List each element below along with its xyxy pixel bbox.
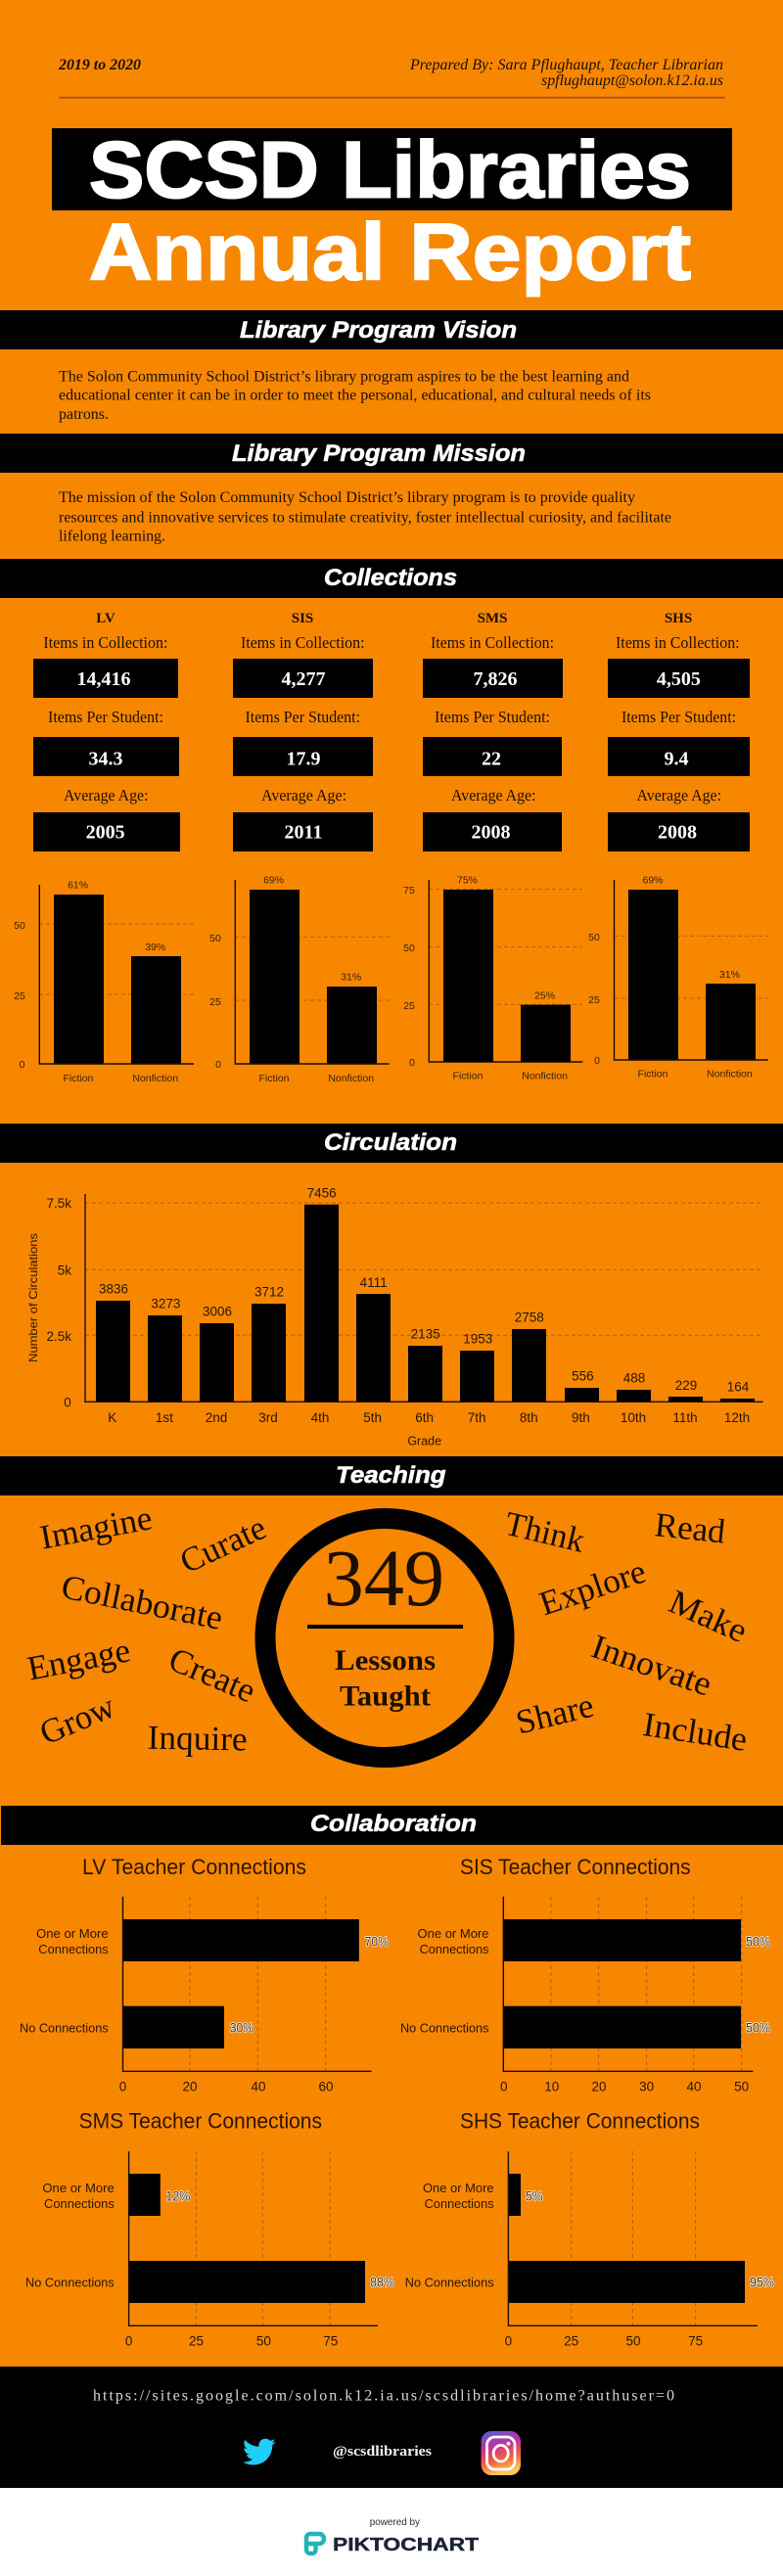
bar chart: SMS teacher connections: 0 [125, 2334, 132, 2349]
word cloud left: Imagine [37, 1498, 155, 1557]
word cloud right: Share [512, 1686, 597, 1741]
panel: SHS stats: 4,505 [657, 668, 701, 690]
bar chart: circulation by grade: 488 [623, 1371, 645, 1386]
bar chart: SIS teacher connections: 50% [746, 1933, 770, 1949]
wordmark: PIKTOCHART [333, 2534, 480, 2554]
lessons taught ring: Taught [340, 1680, 431, 1713]
mission text: lifelong learning. [59, 528, 165, 544]
bar chart: SMS fiction vs nonfiction: 50 [403, 943, 415, 954]
panel: SMS stats: 7,826 [474, 668, 517, 690]
bar chart: SIS teacher connections: 0 [500, 2080, 508, 2094]
word cloud right: Think [501, 1504, 588, 1560]
bar chart: LV fiction vs nonfiction: 39% [145, 942, 165, 953]
bar chart: SMS teacher connections: SMS Teacher Connections [79, 2108, 322, 2133]
panel: LV stats: LV [96, 611, 115, 626]
panel: SHS stats: Average Age: [636, 786, 721, 805]
bar chart: SIS teacher connections: Connections [420, 1943, 489, 1956]
word cloud left: Grow [34, 1686, 120, 1752]
bar chart: LV teacher connections: No Connections [20, 2022, 109, 2036]
word cloud left: Engage [24, 1631, 133, 1688]
bar chart: SMS teacher connections: 12% [165, 2187, 190, 2203]
powered by: powered by [370, 2516, 421, 2528]
bar chart: SMS fiction vs nonfiction: 0 [409, 1057, 415, 1069]
bar chart: SIS teacher connections: No Connections [400, 2022, 489, 2036]
bar chart: SIS fiction vs nonfiction: 69% [263, 875, 284, 887]
bar chart: SMS fiction vs nonfiction [403, 875, 582, 1082]
panel: SMS stats: 2008 [472, 822, 511, 844]
bar chart: SIS fiction vs nonfiction: Nonfiction [328, 1073, 374, 1084]
bar chart: circulation by grade: 3712 [254, 1285, 284, 1300]
lessons taught ring: 349 [324, 1533, 444, 1623]
panel: SIS stats: 4,277 [282, 668, 325, 690]
word cloud right: Explore [534, 1552, 651, 1623]
heading: teaching: Teaching [336, 1462, 446, 1489]
panel: SHS stats: SHS [665, 611, 692, 626]
bar chart: LV fiction vs nonfiction: Nonfiction [132, 1073, 178, 1084]
bar chart: LV teacher connections: LV Teacher Connections [82, 1855, 306, 1879]
word cloud right [501, 1504, 753, 1759]
bar chart: SMS teacher connections: 25 [189, 2334, 204, 2349]
panel: SHS stats: 2008 [658, 822, 697, 844]
bar chart: circulation by grade: Grade [407, 1435, 441, 1449]
social handle: @scsdlibraries [333, 2444, 432, 2460]
heading: vision: Library Program Vision [240, 317, 517, 344]
bar chart: LV teacher connections: 60 [318, 2080, 334, 2094]
preparer: Prepared By: Sara Pflughaupt, Teacher Librarian [409, 57, 723, 73]
bar chart: LV teacher connections: 0 [119, 2080, 126, 2094]
footer: white band [0, 2488, 783, 2576]
word cloud left [24, 1498, 272, 1758]
heading: collections [0, 559, 783, 598]
bar chart: SMS fiction vs nonfiction: 25 [403, 1000, 415, 1012]
bar chart: LV teacher connections [20, 1855, 389, 2094]
bar chart: SIS fiction vs nonfiction [209, 875, 390, 1084]
lessons taught ring [265, 1519, 504, 1758]
bar chart: circulation by grade: 7th [468, 1410, 486, 1425]
panel: SMS stats: SMS [478, 611, 507, 626]
vision text: The Solon Community School District’s library program aspires to be the best learning and [59, 368, 629, 386]
bar chart: SIS teacher connections: 10 [544, 2080, 559, 2094]
bar chart: circulation by grade: 8th [520, 1410, 538, 1425]
word cloud right: Include [640, 1705, 750, 1759]
bar chart: SHS teacher connections: 25 [564, 2334, 578, 2349]
vision text [59, 368, 651, 423]
panel: LV stats: Items in Collection: [43, 633, 167, 652]
bar chart: SMS teacher connections: 75 [323, 2334, 338, 2349]
bar chart: SHS fiction vs nonfiction: 69% [642, 875, 664, 887]
panel: SHS stats: 9.4 [664, 748, 689, 769]
bar chart: SIS fiction vs nonfiction: 31% [341, 971, 361, 983]
panel: LV stats: 14,416 [76, 668, 131, 690]
bar chart: LV teacher connections: 70% [364, 1933, 389, 1949]
mission text: resources and innovative services to stimulate creativity, foster intellectual curiosity, and facilitate [59, 509, 671, 526]
bar chart: LV fiction vs nonfiction: Fiction [64, 1073, 94, 1084]
bar chart: SIS teacher connections: 50% [746, 2020, 770, 2036]
bar chart: circulation by grade: 7.5k [46, 1196, 71, 1211]
panel: SMS stats: Items in Collection: [431, 633, 554, 652]
bar chart: circulation by grade: 4111 [360, 1275, 388, 1290]
bar chart: circulation by grade: 10th [621, 1410, 646, 1425]
bar chart: SIS teacher connections [400, 1855, 770, 2094]
bar chart: LV fiction vs nonfiction [14, 879, 194, 1084]
panel: SIS stats: Items Per Student: [245, 708, 360, 726]
bar chart: circulation by grade: 2135 [411, 1327, 440, 1342]
panel: LV stats: Average Age: [64, 786, 149, 805]
bar chart: SIS fiction vs nonfiction: Fiction [259, 1073, 290, 1084]
word cloud left: Inquire [147, 1719, 248, 1758]
heading: circulation: Circulation [324, 1129, 457, 1156]
bar chart: circulation by grade: 229 [675, 1378, 697, 1393]
bar chart: SMS fiction vs nonfiction: 75% [457, 875, 478, 887]
panel: SIS stats: 2011 [285, 822, 322, 844]
icon: twitter bird [243, 2439, 276, 2465]
word cloud right: Innovate [586, 1627, 716, 1704]
bar chart: circulation by grade: 556 [572, 1369, 594, 1384]
bar chart: SMS fiction vs nonfiction: 25% [534, 990, 555, 1002]
panel: LV stats: 34.3 [88, 748, 123, 769]
bar chart: SHS fiction vs nonfiction: 31% [719, 969, 740, 981]
bar chart: SHS fiction vs nonfiction [588, 875, 768, 1081]
word cloud left: Curate [174, 1508, 272, 1581]
bar chart: LV fiction vs nonfiction: 25 [14, 990, 25, 1002]
bar chart: circulation by grade: 5k [58, 1263, 71, 1277]
lessons taught ring: Lessons [335, 1644, 436, 1677]
icon: piktochart logo [306, 2534, 324, 2553]
bar chart: circulation by grade: 0 [64, 1396, 71, 1410]
bar chart: LV teacher connections: 20 [182, 2080, 198, 2094]
bar chart: SIS teacher connections: 20 [591, 2080, 607, 2094]
bar chart: circulation by grade: 6th [415, 1410, 434, 1425]
word cloud right: Read [653, 1505, 727, 1551]
icon: instagram [482, 2431, 521, 2475]
word cloud right: Make [664, 1583, 753, 1650]
panel: SHS stats: Items in Collection: [616, 633, 740, 652]
bar chart: SHS teacher connections: 0 [505, 2334, 512, 2349]
panel: SMS stats: 22 [482, 748, 501, 769]
bar chart: circulation by grade: 3836 [99, 1282, 128, 1297]
bar chart: circulation by grade: 12th [724, 1410, 750, 1425]
panel: LV stats: 2005 [86, 822, 125, 844]
panel: SHS stats: Items Per Student: [622, 708, 736, 726]
heading: collaboration: Collaboration [310, 1811, 477, 1837]
word cloud left: Collaborate [58, 1567, 226, 1637]
bar chart: circulation by grade: 1st [156, 1410, 173, 1425]
heading: collections: Collections [324, 565, 457, 591]
bar chart: SIS teacher connections: 50 [734, 2080, 749, 2094]
piktochart branding [306, 2516, 480, 2554]
bar chart: SMS fiction vs nonfiction: Fiction [453, 1071, 484, 1082]
title: SCSD Libraries [89, 125, 691, 215]
panel: SIS stats: Average Age: [261, 786, 346, 805]
report years: 2019 to 2020 [58, 57, 141, 73]
heading: teaching [0, 1456, 783, 1495]
bar chart: circulation by grade: 2nd [206, 1410, 227, 1425]
bar chart: LV fiction vs nonfiction: 0 [20, 1059, 25, 1071]
title [52, 125, 732, 298]
panel: SMS stats: Items Per Student: [435, 708, 550, 726]
bar chart: SMS teacher connections [25, 2108, 394, 2349]
bar chart: LV teacher connections: Connections [38, 1943, 109, 1956]
heading: collaboration [1, 1806, 783, 1845]
bar chart: SHS teacher connections: No Connections [405, 2277, 494, 2290]
bar chart: SMS teacher connections: 88% [370, 2275, 394, 2290]
bar chart: SHS teacher connections: 95% [750, 2275, 774, 2290]
bar chart: circulation by grade: 11th [672, 1410, 698, 1425]
bar chart: circulation by grade: Number of Circulations [26, 1233, 40, 1362]
bar chart: SIS teacher connections: One or More [417, 1927, 489, 1941]
bar chart: circulation by grade: 2758 [515, 1311, 544, 1325]
panel: SIS stats [233, 611, 373, 851]
bar chart: circulation by grade: 3273 [151, 1297, 180, 1311]
bar chart: SIS teacher connections: SIS Teacher Connections [460, 1855, 691, 1879]
bar chart: circulation by grade [26, 1185, 763, 1449]
bar chart: LV teacher connections: 40 [251, 2080, 266, 2094]
header info [58, 57, 724, 99]
website url: https://sites.google.com/solon.k12.ia.us/scsdlibraries/home?authuser=0 [93, 2388, 674, 2405]
bar chart: SHS fiction vs nonfiction: 25 [588, 994, 600, 1006]
bar chart: circulation by grade: 5th [363, 1410, 382, 1425]
bar chart: circulation by grade: 2.5k [46, 1329, 71, 1344]
panel: SIS stats: 17.9 [286, 748, 321, 769]
vision text: educational center it can be in order to meet the personal, educational, and cultural needs of its [59, 388, 651, 403]
panel: LV stats: Items Per Student: [48, 708, 163, 726]
bar chart: SHS teacher connections: 75 [688, 2334, 703, 2349]
bar chart: SMS teacher connections: One or More [42, 2182, 115, 2195]
bar chart: SMS teacher connections: Connections [44, 2197, 115, 2211]
bar chart: LV teacher connections: 30% [230, 2020, 253, 2036]
panel: SHS stats [608, 611, 750, 851]
bar chart: circulation by grade: 3006 [203, 1305, 232, 1319]
bar chart: SMS teacher connections: 50 [256, 2334, 271, 2349]
bar chart: circulation by grade: 9th [572, 1410, 590, 1425]
panel: SIS stats: SIS [292, 611, 313, 626]
heading: mission: Library Program Mission [232, 440, 526, 467]
bar chart: SHS teacher connections: One or More [423, 2182, 494, 2195]
bar chart: SHS fiction vs nonfiction: 0 [594, 1055, 600, 1067]
bar chart: SHS fiction vs nonfiction: Fiction [638, 1069, 668, 1081]
bar chart: SMS fiction vs nonfiction: 75 [403, 885, 415, 897]
bar chart: SIS teacher connections: 30 [639, 2080, 654, 2094]
word cloud left: Create [163, 1639, 261, 1710]
panel: SMS stats [423, 611, 563, 851]
bar chart: SIS fiction vs nonfiction: 50 [209, 933, 221, 944]
bar chart: SHS teacher connections [405, 2108, 774, 2349]
bar chart: circulation by grade: 164 [727, 1380, 750, 1395]
vision text: patrons. [59, 406, 109, 423]
bar chart: SHS teacher connections: 5% [526, 2187, 543, 2203]
bar chart: circulation by grade: K [108, 1410, 116, 1425]
bar chart: SHS teacher connections: Connections [425, 2197, 494, 2211]
bar chart: SHS teacher connections: SHS Teacher Connections [460, 2108, 700, 2133]
bar chart: circulation by grade: 7456 [307, 1185, 337, 1200]
bar chart: SHS fiction vs nonfiction: 50 [588, 932, 600, 943]
bar chart: LV teacher connections: One or More [36, 1927, 109, 1941]
bar chart: circulation by grade: 3rd [258, 1410, 278, 1425]
mission text: The mission of the Solon Community School District’s library program is to provide quality [59, 489, 635, 506]
bar chart: circulation by grade: 4th [311, 1410, 329, 1425]
bar chart: circulation by grade: 1953 [463, 1332, 492, 1347]
panel: SIS stats: Items in Collection: [241, 633, 364, 652]
bar chart: LV fiction vs nonfiction: 50 [14, 920, 25, 932]
heading: circulation [0, 1124, 783, 1163]
bar chart: SMS fiction vs nonfiction: Nonfiction [522, 1071, 568, 1082]
footer panel [0, 2367, 783, 2488]
bar chart: SMS teacher connections: No Connections [25, 2277, 115, 2290]
heading: vision [0, 310, 783, 349]
heading: mission [0, 434, 783, 473]
bar chart: LV fiction vs nonfiction: 61% [68, 879, 88, 891]
bar chart: SHS fiction vs nonfiction: Nonfiction [707, 1069, 753, 1081]
bar chart: SIS fiction vs nonfiction: 0 [215, 1059, 221, 1071]
bar chart: SIS fiction vs nonfiction: 25 [209, 996, 221, 1008]
bar chart: SIS teacher connections: 40 [686, 2080, 702, 2094]
title: Annual Report [89, 207, 691, 298]
bar chart: SHS teacher connections: 50 [625, 2334, 641, 2349]
email: spflughaupt@solon.k12.ia.us [541, 72, 723, 89]
mission text [59, 489, 671, 544]
panel: LV stats [33, 611, 180, 851]
panel: SMS stats: Average Age: [451, 786, 536, 805]
